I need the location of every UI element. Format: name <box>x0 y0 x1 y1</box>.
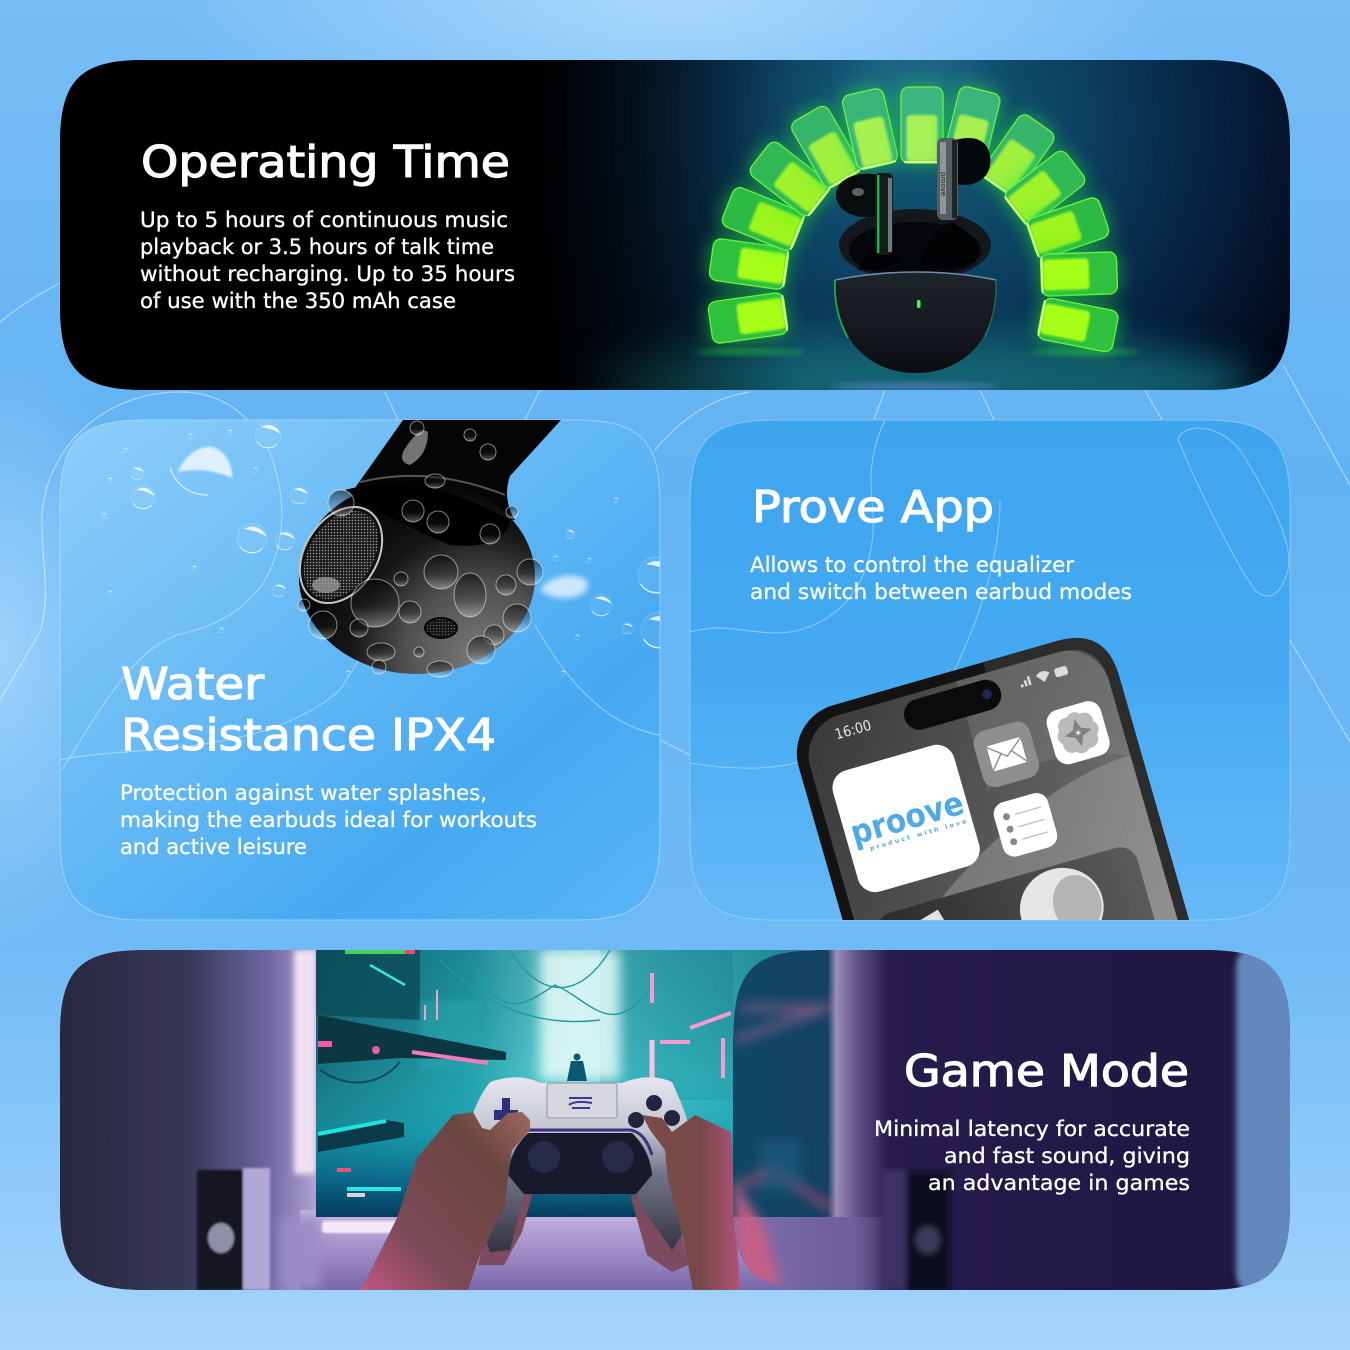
text: prove app description <box>750 553 1132 604</box>
photos app icon <box>1046 701 1110 764</box>
speaker <box>197 1168 270 1290</box>
text: water resistance description <box>120 781 537 859</box>
text: water resistance description: making the earbuds ideal for workouts <box>120 808 537 832</box>
panel: prove app <box>690 420 1290 920</box>
panel: water resistance <box>60 420 677 920</box>
heading: operating time: Operating Time <box>141 137 510 188</box>
game screen <box>316 950 836 1217</box>
panel: operating time <box>60 60 1290 390</box>
right hand back <box>631 1194 688 1272</box>
heading: water resistance: Water <box>121 659 265 710</box>
room wall and floor <box>60 950 840 1290</box>
text: game mode description: an advantage in games <box>928 1171 1190 1195</box>
proove widget: product with love <box>869 818 967 852</box>
text: water resistance description: Protection against water splashes, <box>120 781 487 805</box>
water bubbles <box>101 422 677 676</box>
battery arc <box>707 85 1119 353</box>
right buildings <box>600 950 733 1100</box>
clock: 16:00 <box>833 718 873 743</box>
distant figure <box>567 1054 587 1081</box>
left earbud <box>836 173 893 255</box>
wet earbud <box>283 420 561 677</box>
decorative wave lines <box>60 448 660 770</box>
text: operating time description: without recharging. Up to 35 hours <box>140 262 515 286</box>
panel background <box>60 60 1290 390</box>
left buildings <box>316 950 420 1020</box>
proove widget: proove <box>846 783 968 852</box>
heading: water resistance <box>121 659 496 761</box>
smartphone <box>796 638 1189 920</box>
heading: water resistance: Resistance IPX4 <box>121 710 496 761</box>
mail app icon <box>974 722 1040 788</box>
heading: prove app: Prove App <box>752 482 994 533</box>
right hand <box>642 1115 740 1290</box>
text: operating time description: playback or 3.5 hours of talk time <box>140 235 494 259</box>
headphones widget <box>880 847 1155 920</box>
decorative wave lines <box>690 420 1289 768</box>
right earbud <box>937 138 990 220</box>
heading: game mode: Game Mode <box>904 1046 1189 1097</box>
dynamic island <box>904 680 1002 730</box>
panel: game mode <box>60 946 1306 1294</box>
text: operating time description <box>140 208 515 313</box>
status icons <box>1020 666 1068 688</box>
charging case with earbuds <box>830 138 1000 390</box>
reminders app icon <box>994 793 1058 857</box>
text: operating time description: of use with the 350 mAh case <box>140 289 456 313</box>
text: prove app description: and switch between earbud modes <box>750 580 1132 604</box>
text: water resistance description: and active leisure <box>120 835 307 859</box>
text: prove app description: Allows to control the equalizer <box>750 553 1074 577</box>
text: game mode description <box>874 1117 1190 1195</box>
game controller <box>463 1077 700 1252</box>
right earbud: proove <box>939 172 947 196</box>
frosted overlay panel <box>733 946 1306 1294</box>
left hand back <box>478 1194 532 1265</box>
left hand <box>361 1112 530 1290</box>
text: game mode description: Minimal latency for accurate <box>874 1117 1190 1141</box>
text: operating time description: Up to 5 hours of continuous music <box>140 208 508 232</box>
proove widget <box>828 741 984 896</box>
text: game mode description: and fast sound, giving <box>944 1144 1190 1168</box>
